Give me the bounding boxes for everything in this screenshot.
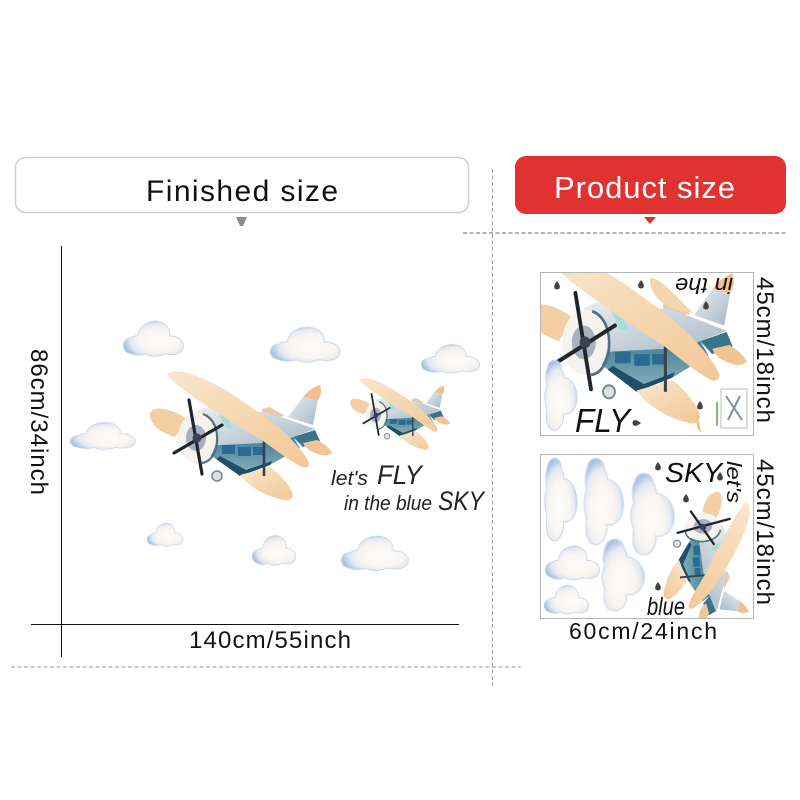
panel: sticker sheet 1 [540, 272, 754, 436]
panel: sticker sheet 2 [540, 454, 759, 628]
clouds: finished layout [70, 321, 479, 571]
width label: 140cm/55inch [189, 627, 351, 654]
slogan text [331, 460, 486, 516]
height label: 86cm/34inch [25, 349, 52, 495]
panel: sticker sheet 2: SKY [665, 457, 724, 488]
slogan text: SKY [438, 486, 486, 516]
header: finished size [16, 158, 468, 226]
slogan text: FLY [377, 460, 424, 490]
header: product size: Product size [554, 170, 735, 205]
header: product size [515, 156, 786, 224]
sheet 2 height label: 45cm/18inch [751, 459, 778, 605]
panel: sticker sheet 2: let's [722, 461, 744, 503]
sheets width label: 60cm/24inch [569, 618, 717, 644]
panel: sticker sheet 1: in the [675, 273, 733, 298]
small biplane [350, 378, 450, 450]
slogan text: let's [331, 468, 368, 490]
header: finished size: Finished size [146, 175, 338, 208]
finished size axes [31, 246, 459, 657]
large biplane [150, 372, 332, 500]
panel: sticker sheet 1: FLY [575, 402, 632, 439]
panel: sticker sheet 2: blue [647, 593, 685, 621]
slogan text: in the blue [344, 493, 432, 515]
sheet 1 height label: 45cm/18inch [751, 277, 778, 423]
